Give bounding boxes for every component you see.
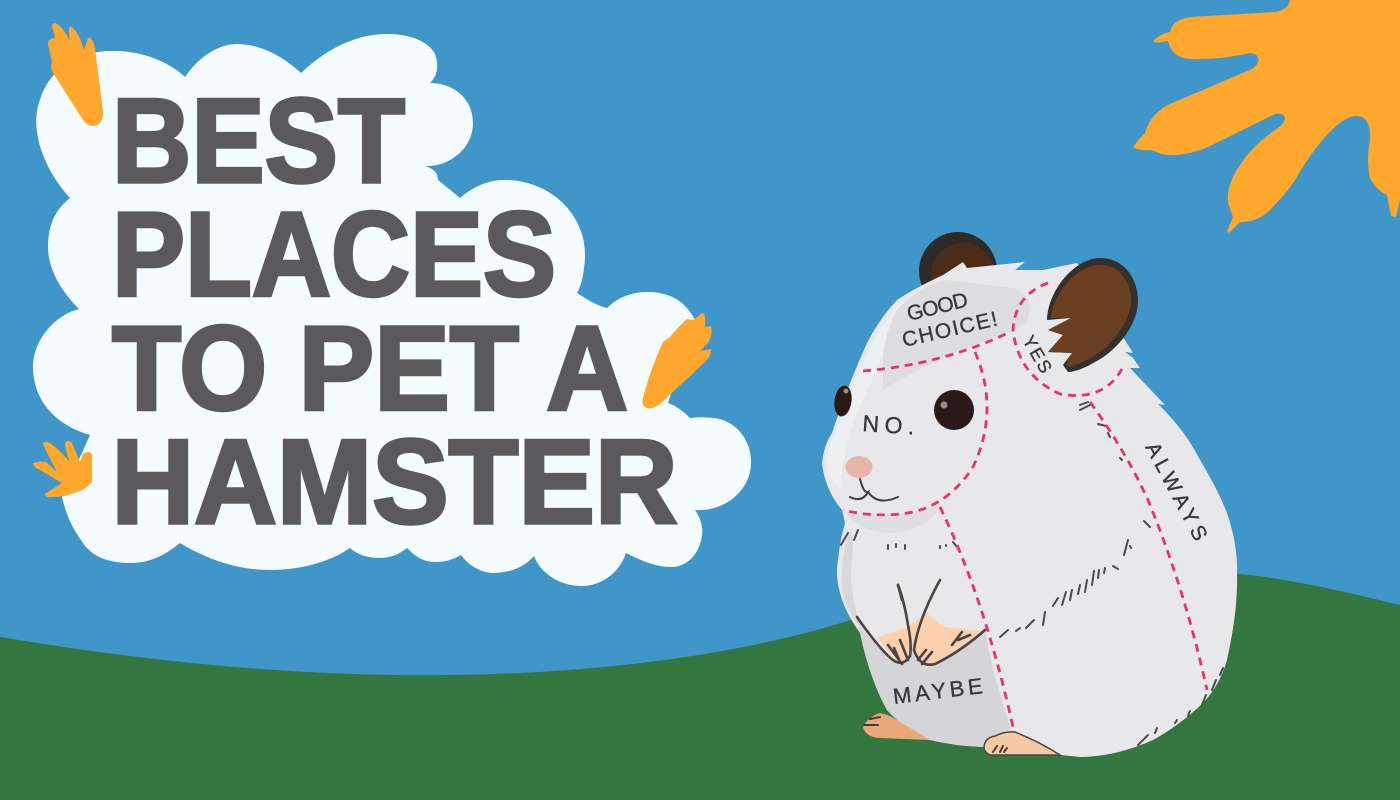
right ear xyxy=(1047,258,1138,372)
patch: good choice xyxy=(883,280,1030,390)
paw: top left xyxy=(48,23,103,126)
paw: middle right xyxy=(642,313,712,408)
label: good choice xyxy=(900,289,1000,352)
title: PLACES xyxy=(112,188,556,322)
head highlight xyxy=(826,290,930,490)
left side shading xyxy=(842,530,862,630)
right foot xyxy=(984,732,1060,755)
title: HAMSTER xyxy=(112,415,678,549)
left foot xyxy=(863,713,930,740)
left ear xyxy=(919,232,997,310)
eyes xyxy=(832,384,974,430)
label: no: NO. xyxy=(862,410,915,440)
toe lines xyxy=(864,717,1007,752)
mouth xyxy=(850,479,898,501)
label: maybe: MAYBE xyxy=(892,673,984,709)
chin shade xyxy=(845,505,940,533)
label: always: ALWAYS xyxy=(1141,439,1212,545)
hamster body xyxy=(822,262,1237,757)
label: yes: YES xyxy=(1019,332,1056,377)
green hill xyxy=(0,573,1400,800)
nose xyxy=(846,456,872,478)
cloud xyxy=(33,34,751,586)
patch: maybe xyxy=(858,622,1011,747)
dashed regions xyxy=(843,283,1207,727)
hamster xyxy=(822,232,1237,757)
title xyxy=(112,74,678,549)
sun xyxy=(1133,0,1400,233)
label: good choice: GOOD xyxy=(905,289,970,326)
arm lines xyxy=(857,580,985,665)
belly xyxy=(878,613,985,665)
title: BEST xyxy=(112,74,405,208)
label: good choice: CHOICE! xyxy=(900,308,1000,352)
fur ticks xyxy=(841,402,1223,745)
title: TO PET A xyxy=(112,302,628,436)
paw: bottom left xyxy=(33,441,92,497)
